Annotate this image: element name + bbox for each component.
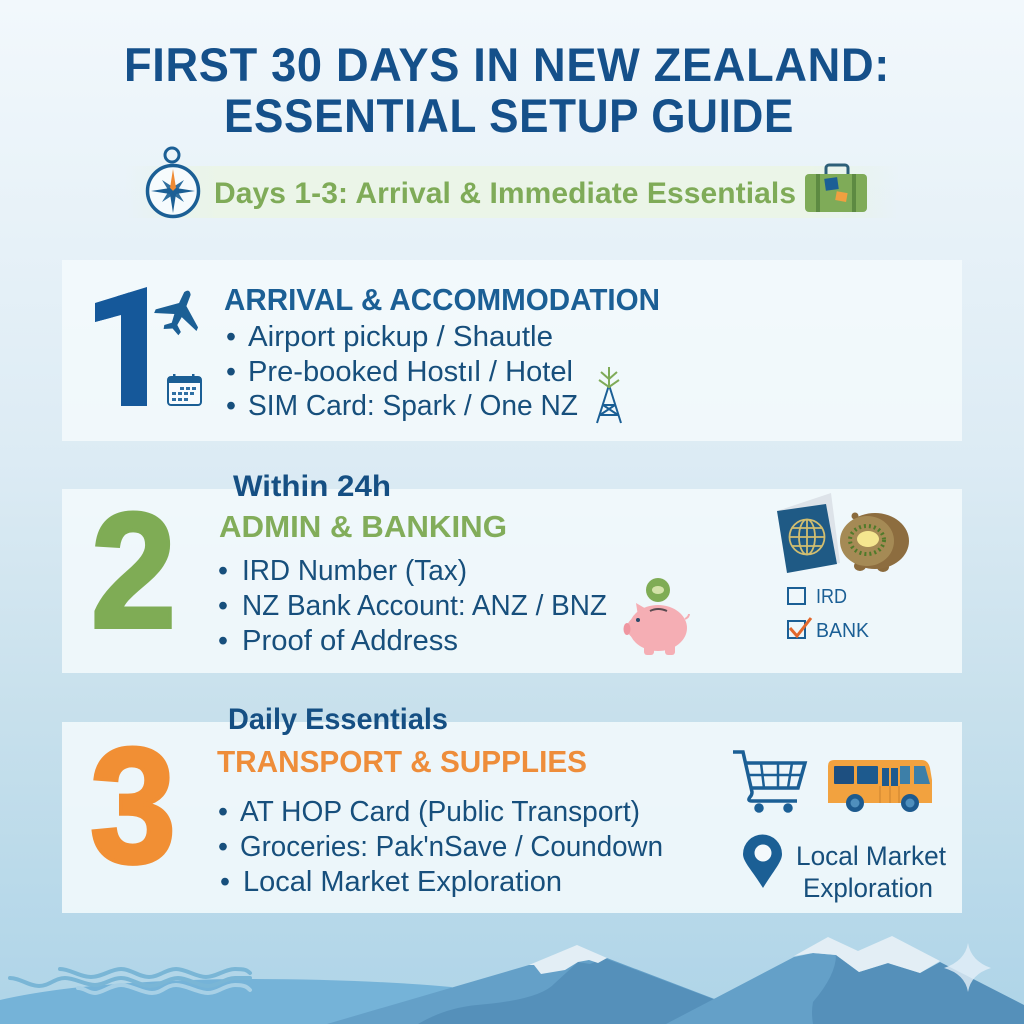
- list: admin: •: [218, 625, 228, 657]
- list: admin: [218, 555, 607, 657]
- heading: transport: TRANSPORT & SUPPLIES: [217, 744, 587, 779]
- list: arrival: SIM Card: Spark / One NZ: [248, 390, 578, 422]
- label: within 24h: Within 24h: [233, 470, 391, 503]
- list: arrival: [226, 321, 578, 422]
- icon: compass: [148, 148, 198, 216]
- panel: transport and supplies: [62, 703, 962, 913]
- mountains and waves: [0, 936, 1024, 1024]
- label: local market exploration: Local Market: [796, 841, 946, 871]
- heading: arrival: ARRIVAL & ACCOMMODATION: [224, 282, 660, 317]
- list: arrival: •: [226, 321, 236, 353]
- title: FIRST 30 DAYS IN NEW ZEALAND:: [124, 38, 890, 91]
- icon: passport: [777, 493, 840, 573]
- list: transport: AT HOP Card (Public Transport): [240, 796, 640, 828]
- list: admin: •: [218, 590, 228, 622]
- icon: map pin: [743, 834, 782, 888]
- label: daily essentials: Daily Essentials: [228, 703, 448, 736]
- number 1: 1: [83, 257, 175, 441]
- number 3: 3: [90, 714, 176, 897]
- heading: admin: ADMIN & BANKING: [219, 509, 507, 544]
- icon: kiwi fruit: [840, 512, 909, 572]
- checklist: [788, 586, 870, 642]
- checklist: IRD: [816, 586, 847, 608]
- list: admin: NZ Bank Account: ANZ / BNZ: [242, 590, 607, 622]
- icon: calendar: [168, 374, 201, 405]
- list: arrival: •: [226, 356, 236, 388]
- list: transport: Groceries: Pak'nSave / Coundown: [240, 831, 663, 863]
- list: transport: •: [218, 796, 228, 828]
- list: admin: IRD Number (Tax): [242, 555, 467, 587]
- subtitle ribbon: [125, 166, 900, 218]
- panel: admin and banking: [62, 470, 962, 673]
- icon: suitcase: [805, 165, 867, 212]
- icon: bus: [828, 760, 932, 812]
- icon: shopping cart: [733, 752, 805, 811]
- title: ESSENTIAL SETUP GUIDE: [224, 89, 794, 142]
- icon: waves: [10, 969, 250, 993]
- list: arrival: Airport pickup / Shautle: [248, 321, 553, 353]
- list: arrival: Pre-booked Hostıl / Hotel: [248, 356, 573, 388]
- list: admin: Proof of Address: [242, 625, 458, 657]
- number 2: 2: [91, 479, 176, 662]
- checklist: BANK: [816, 620, 870, 642]
- icon: airplane: [150, 282, 210, 341]
- title: [124, 38, 890, 142]
- list: admin: •: [218, 555, 228, 587]
- label: local market exploration: Exploration: [803, 873, 933, 903]
- subtitle text: Days 1-3: Arrival & Immediate Essentials: [214, 177, 796, 210]
- list: transport: Local Market Exploration: [243, 866, 562, 898]
- list: arrival: •: [226, 390, 236, 422]
- list: transport: [218, 796, 663, 898]
- list: transport: •: [218, 831, 228, 863]
- list: transport: •: [220, 866, 230, 898]
- icon: piggy bank: [624, 578, 689, 655]
- icon: snow caps: [529, 936, 940, 974]
- icon: cell tower: [597, 367, 621, 423]
- icon: sparkle: [944, 943, 991, 992]
- label: local market exploration: [796, 841, 946, 903]
- panel: arrival and accommodation: [62, 257, 962, 441]
